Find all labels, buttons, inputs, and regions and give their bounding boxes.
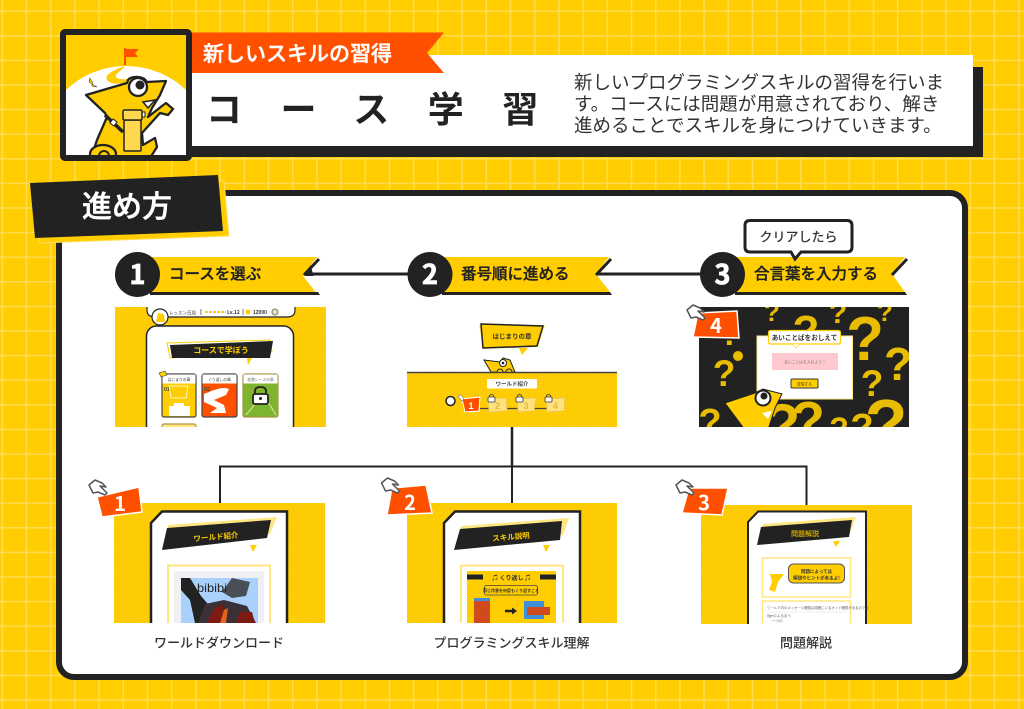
step 1 header: 1 xyxy=(130,253,145,292)
cursor hand xyxy=(676,480,694,495)
hint box: 解説やヒントがあるよ! xyxy=(793,574,840,582)
question marks: ? xyxy=(884,338,912,390)
step 1 header xyxy=(115,252,326,297)
yellow map band xyxy=(407,372,617,427)
skill diagram xyxy=(461,566,563,626)
badge 1 xyxy=(97,487,142,517)
skill diagram: ♫ くり返し ♫ xyxy=(492,573,531,582)
stage 2 xyxy=(488,394,507,412)
page heading: ワールド紹介 xyxy=(193,530,239,544)
caption: programming skill: プログラミングスキル理解 xyxy=(433,632,590,652)
description text: 進めることでスキルを身につけていきます。 xyxy=(574,115,942,136)
question marks: ? xyxy=(846,305,884,374)
course card 3 locked: 変数レースの章 xyxy=(247,377,274,383)
course card 4 xyxy=(161,423,197,427)
page heading xyxy=(162,517,277,552)
question marks: ? xyxy=(764,392,800,459)
question marks: ? xyxy=(877,297,893,327)
description text: す。コースには問題が用意されており、解き xyxy=(574,94,939,114)
step 3 header: 3 xyxy=(715,253,730,292)
world name box: ワールド紹介 xyxy=(495,380,529,388)
page frame xyxy=(151,512,287,630)
question marks xyxy=(700,307,909,427)
question marks: ? xyxy=(720,315,740,353)
question marks: ? xyxy=(791,390,825,452)
step 2 header xyxy=(408,252,612,297)
page heading: スキル説明 xyxy=(492,530,531,544)
status bar: 12000 xyxy=(253,310,267,316)
status bar xyxy=(146,307,296,326)
dialog: あいことばを入れよう！ xyxy=(784,360,826,366)
screenshot: world map xyxy=(407,324,617,427)
course window xyxy=(146,325,294,427)
step 3 header: 合言葉を入力する xyxy=(754,262,878,284)
stage line xyxy=(480,408,550,410)
section heading tag: 進め方 xyxy=(82,182,172,226)
status bar: レッスン日周 xyxy=(169,310,196,316)
question marks: ? xyxy=(829,411,849,447)
world name box xyxy=(487,379,537,388)
course heading: コースで学ぼう xyxy=(193,345,249,356)
step 2 header: 番号順に進める xyxy=(461,262,570,284)
page heading: 問題解説 xyxy=(791,529,819,539)
orange ribbon xyxy=(192,32,444,73)
question marks: ? xyxy=(713,353,735,394)
section heading tag xyxy=(30,175,229,243)
panel: how to proceed xyxy=(59,193,965,677)
screenshot: password xyxy=(699,307,909,427)
question marks: ? xyxy=(698,402,722,444)
course card 3 locked: 03 xyxy=(245,387,251,393)
question marks: ? xyxy=(793,307,819,356)
mascot icon box xyxy=(60,29,192,161)
step 3 header xyxy=(700,252,907,297)
screenshot: course select xyxy=(115,307,326,427)
hint box: 問題によっては xyxy=(801,568,833,575)
stage 1 xyxy=(458,395,480,412)
screenshot: problem explanation xyxy=(701,505,912,631)
page frame xyxy=(748,512,866,630)
question marks: ? xyxy=(865,385,907,463)
explanation box: 一つの xyxy=(772,619,783,624)
world image: bibibi xyxy=(197,581,227,595)
dialog: 送信する xyxy=(797,382,812,388)
badge 4 xyxy=(693,310,739,339)
badge 2: 2 xyxy=(404,487,416,516)
stage 1: 1 xyxy=(468,401,474,411)
course card 2 xyxy=(202,374,237,417)
question marks: ? xyxy=(850,407,874,449)
question marks: ? xyxy=(861,363,883,404)
course card 1 xyxy=(159,371,196,417)
course card 2: 02 xyxy=(204,387,210,393)
hint box xyxy=(762,558,850,597)
callout: after clearing: クリアしたら xyxy=(759,226,838,246)
status bar: Lv.12 xyxy=(227,309,240,316)
sign: first chapter: はじまりの章 xyxy=(492,330,532,340)
badge 2 xyxy=(387,485,432,516)
question marks: ? xyxy=(764,297,780,327)
page frame xyxy=(444,512,580,630)
header panel shadow xyxy=(192,67,983,157)
explanation box: Ageのふるまう xyxy=(767,613,791,619)
stage 4: 4 xyxy=(553,401,558,411)
question marks: ? xyxy=(829,297,847,330)
badge 1: 1 xyxy=(114,488,126,517)
step 1 header: コースを選ぶ xyxy=(169,262,262,284)
dialog xyxy=(757,330,852,399)
sign: first chapter xyxy=(479,324,545,355)
course heading xyxy=(167,340,273,365)
caption: world download: ワールドダウンロード xyxy=(154,632,284,652)
course card 2: くり返しの章 xyxy=(208,377,231,383)
cursor hand xyxy=(687,305,705,320)
explanation box xyxy=(762,600,868,624)
stage 2: 2 xyxy=(495,401,500,411)
mascot xyxy=(725,389,782,430)
back button xyxy=(446,396,455,406)
stage 4 xyxy=(545,394,565,412)
header: course learning xyxy=(60,29,983,161)
description text xyxy=(574,72,944,136)
header panel xyxy=(192,55,973,146)
callout: after clearing xyxy=(745,220,852,259)
dialog: あいことばをおしえて xyxy=(772,332,837,342)
screenshot: skill explanation xyxy=(407,503,617,630)
cursor hand xyxy=(382,478,400,493)
page heading xyxy=(757,517,856,547)
world image xyxy=(168,566,270,626)
flow connector lines xyxy=(220,274,806,505)
explanation box: ワールド内のメッセージ確認は周囲にいるオッド確認があるのでは xyxy=(767,605,869,610)
mascot small xyxy=(484,358,515,375)
skill diagram: 同じ作業を何度もくり返すこと xyxy=(483,587,539,594)
orange ribbon: 新しいスキルの習得 xyxy=(203,38,392,68)
step 2 header: 2 xyxy=(422,253,438,292)
badge 4: 4 xyxy=(710,310,722,339)
course card 3 locked xyxy=(243,374,278,417)
page heading xyxy=(454,518,569,552)
course card 1: はじまりの章 xyxy=(168,377,191,383)
stage 3 xyxy=(516,394,536,412)
main title: コース学習 xyxy=(206,81,577,133)
badge 3 xyxy=(682,487,728,516)
course card 1: 01 xyxy=(164,387,170,393)
screenshot: world introduction xyxy=(114,503,325,630)
stage 3: 3 xyxy=(523,401,529,411)
description text: 新しいプログラミングスキルの習得を行いま xyxy=(574,72,944,93)
cursor hand xyxy=(89,480,107,495)
caption: problem explanation: 問題解説 xyxy=(780,632,832,652)
badge 3: 3 xyxy=(698,487,710,516)
